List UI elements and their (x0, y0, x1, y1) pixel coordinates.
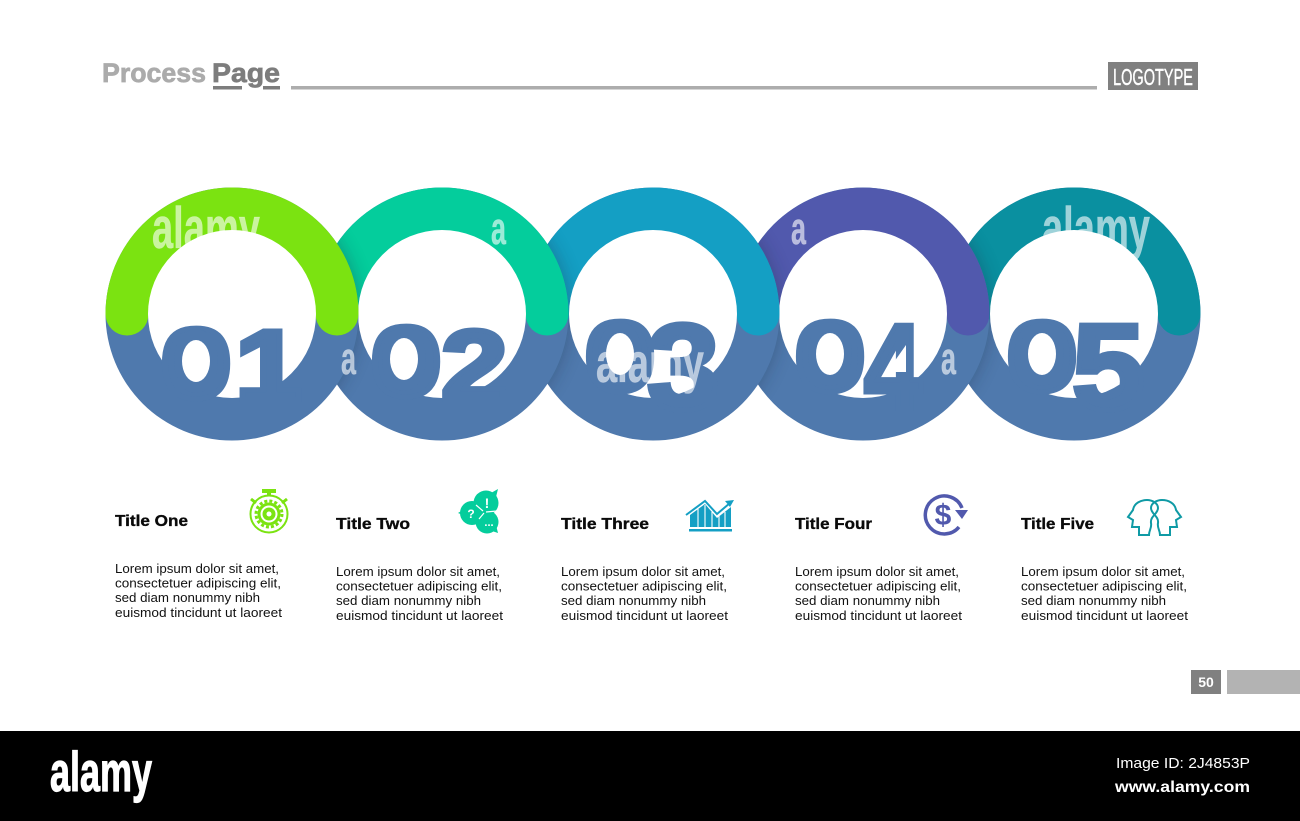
icon: speech bubbles: ! (485, 495, 489, 511)
page number (1191, 670, 1300, 694)
ring 03: 3 (647, 299, 720, 435)
logotype badge: LOGOTYPE (1113, 64, 1193, 90)
ring 04: 4 (864, 299, 922, 435)
image id: Image ID: 2J4853P (1116, 755, 1250, 772)
icon: two heads (1128, 500, 1181, 535)
stock footer bar (0, 731, 1300, 821)
description three: sed diam nonummy nibh (561, 594, 706, 608)
ring 01: 1 (235, 310, 302, 422)
footer url: www.alamy.com (1114, 779, 1250, 796)
stock watermarks over rings (152, 196, 1150, 394)
title five: Title Five (1021, 516, 1094, 533)
description five: sed diam nonummy nibh (1021, 594, 1166, 608)
stock watermarks over rings: a (941, 333, 957, 384)
description one: consectetuer adipiscing elit, (115, 576, 281, 590)
description two (336, 565, 504, 623)
column 1 (115, 489, 288, 620)
description one: euismod tincidunt ut laoreet (115, 606, 283, 620)
description two: sed diam nonummy nibh (336, 594, 481, 608)
description two: consectetuer adipiscing elit, (336, 580, 502, 594)
ring 03 (548, 188, 780, 440)
ring 02: 2 (441, 310, 508, 422)
icon: speech bubbles (458, 489, 498, 534)
ring 04: 0 (794, 300, 866, 413)
description five: euismod tincidunt ut laoreet (1021, 609, 1189, 623)
title three: Title Three (561, 516, 649, 533)
process chain of five rings (106, 188, 1200, 440)
ring 04 (758, 188, 990, 440)
column 2 (336, 489, 504, 623)
description four: euismod tincidunt ut laoreet (795, 609, 963, 623)
ring 02 (337, 188, 568, 440)
header title: Process (102, 58, 206, 88)
ring 02: 0 (370, 305, 442, 418)
icon: dollar cycle (925, 496, 968, 534)
description one (115, 562, 283, 620)
description five: consectetuer adipiscing elit, (1021, 580, 1187, 594)
stock watermarks over rings: a (491, 203, 507, 254)
icon: stopwatch gear (250, 489, 288, 532)
stock watermarks over rings: alamy (1042, 196, 1150, 261)
description five (1021, 565, 1189, 623)
ring 05: 0 (1006, 300, 1078, 413)
icon: speech bubbles: ? (467, 507, 475, 521)
stock watermarks over rings: alamy (596, 331, 704, 394)
description four: consectetuer adipiscing elit, (795, 580, 961, 594)
description three: Lorem ipsum dolor sit amet, (561, 565, 725, 579)
description five: Lorem ipsum dolor sit amet, (1021, 565, 1185, 579)
description two: Lorem ipsum dolor sit amet, (336, 565, 500, 579)
header title (102, 58, 280, 90)
column 3 (561, 500, 734, 623)
ring 05: 5 (1072, 299, 1145, 435)
description four (795, 565, 963, 623)
description three (561, 565, 729, 623)
description one: sed diam nonummy nibh (115, 591, 260, 605)
ring 01 (106, 188, 358, 440)
column 4 (795, 496, 968, 623)
footer logo: alamy (50, 740, 152, 803)
logotype badge (1108, 62, 1198, 90)
stock watermarks over rings: a (341, 333, 357, 384)
stock watermarks over rings: alamy (152, 196, 260, 261)
page number: 50 (1198, 674, 1214, 690)
title four: Title Four (795, 516, 872, 533)
icon: dollar cycle: $ (935, 499, 952, 532)
header title: Page (212, 58, 280, 88)
title one: Title One (115, 513, 188, 530)
stock watermarks over rings: a (791, 203, 807, 254)
description two: euismod tincidunt ut laoreet (336, 609, 504, 623)
title two: Title Two (336, 516, 410, 533)
description three: consectetuer adipiscing elit, (561, 580, 727, 594)
description three: euismod tincidunt ut laoreet (561, 609, 729, 623)
ring 05 (968, 188, 1200, 440)
ring 03: 0 (584, 300, 656, 413)
icon: speech bubbles: ... (484, 517, 494, 529)
description four: Lorem ipsum dolor sit amet, (795, 565, 959, 579)
ring 01: 0 (160, 307, 232, 420)
column 5 (1021, 500, 1189, 623)
icon: rising bar chart (686, 500, 734, 532)
description one: Lorem ipsum dolor sit amet, (115, 562, 279, 576)
description four: sed diam nonummy nibh (795, 594, 940, 608)
